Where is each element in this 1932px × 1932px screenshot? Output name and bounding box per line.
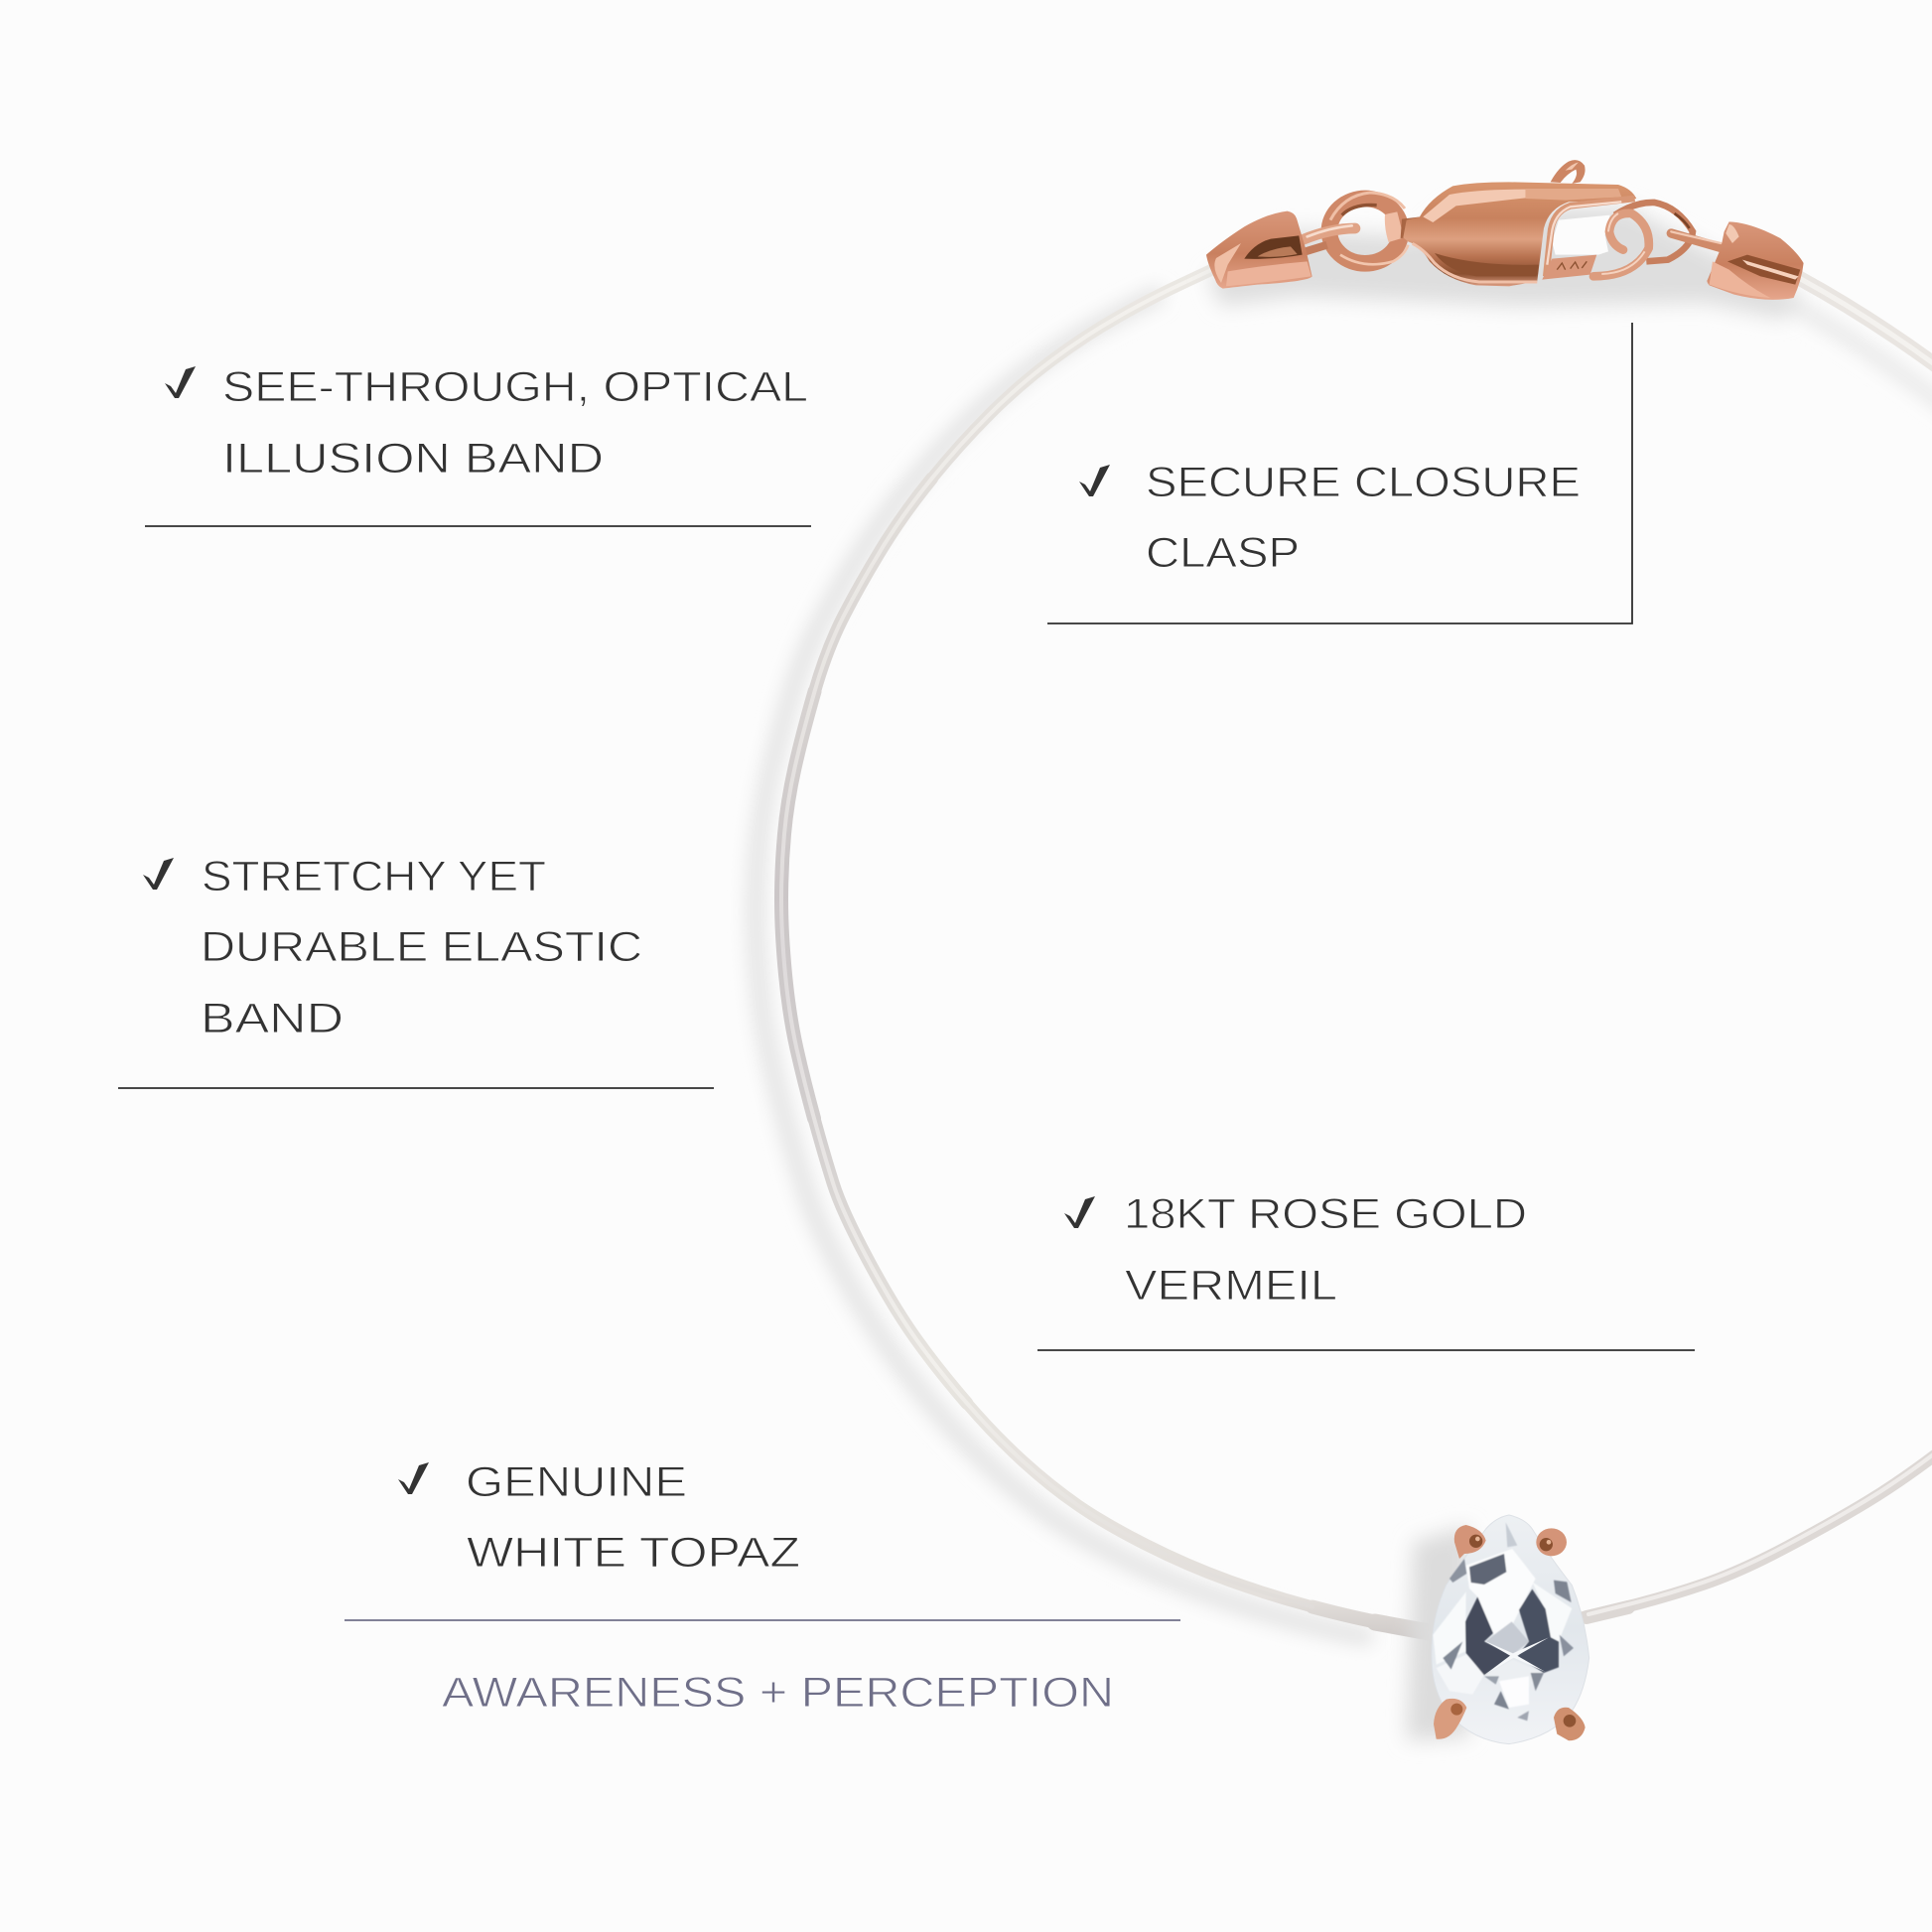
text: secure closure: SECURE CLOSURE	[1146, 459, 1581, 506]
left end cap	[1206, 211, 1312, 289]
lobster clasp opening	[1552, 215, 1610, 255]
icon: check	[1079, 465, 1110, 496]
text: secure closure: CLASP	[1146, 529, 1300, 577]
callout: white topaz	[345, 1458, 1180, 1620]
gem with prongs	[1407, 1515, 1589, 1744]
bracelet band	[756, 269, 1932, 1636]
text: elastic band	[201, 853, 642, 1042]
text: white topaz: WHITE TOPAZ	[467, 1529, 800, 1577]
text: see-through band: SEE-THROUGH, OPTICAL	[222, 363, 808, 411]
gem facets	[1433, 1522, 1574, 1721]
text: rose gold vermeil	[1124, 1190, 1527, 1310]
icon: check	[398, 1462, 429, 1494]
text: see-through band: ILLUSION BAND	[222, 435, 604, 483]
text: white topaz: GENUINE	[466, 1458, 687, 1506]
icon: check	[143, 858, 174, 890]
lobster lever	[1551, 160, 1586, 184]
clasp shadow	[1208, 207, 1800, 320]
band right upper shadow	[1788, 302, 1932, 411]
right end cap	[1707, 221, 1804, 300]
icon: check	[1064, 1196, 1095, 1228]
text: rose gold vermeil: VERMEIL	[1125, 1262, 1337, 1310]
lobster frame	[1546, 199, 1635, 276]
tagline: AWARENESS + PERCEPTION	[442, 1669, 1114, 1717]
gem outline	[1432, 1515, 1589, 1744]
gem shadow	[1407, 1526, 1469, 1740]
band shadow	[756, 296, 1365, 1636]
band right upper	[1799, 278, 1932, 365]
text: elastic band: STRETCHY YET	[202, 853, 546, 900]
text: elastic band: BAND	[201, 995, 344, 1042]
icon: check	[165, 366, 196, 398]
callout: elastic band	[118, 853, 714, 1088]
left pin	[1303, 228, 1355, 240]
callout: see-through band	[145, 363, 811, 526]
right pin	[1671, 233, 1723, 248]
clasp	[1206, 160, 1804, 320]
right large ring	[1615, 203, 1693, 261]
text: secure closure	[1146, 459, 1581, 577]
callout: secure closure	[1047, 323, 1632, 623]
band highlight	[781, 269, 1312, 1606]
text: elastic band: DURABLE ELASTIC	[201, 923, 642, 971]
lobster claw body	[1403, 182, 1636, 286]
band segments	[781, 269, 1440, 1634]
lobster connector	[1385, 211, 1404, 242]
callout: rose gold vermeil	[1037, 1190, 1695, 1350]
text: see-through band	[222, 363, 808, 483]
right small ring	[1593, 213, 1649, 276]
gem star	[1484, 1637, 1549, 1675]
left ring	[1329, 193, 1408, 264]
prongs	[1454, 1525, 1486, 1559]
text: rose gold vermeil: 18KT ROSE GOLD	[1124, 1190, 1527, 1238]
lobster lug	[1542, 255, 1596, 280]
band right lower	[1584, 1454, 1932, 1617]
text: white topaz	[466, 1458, 800, 1577]
